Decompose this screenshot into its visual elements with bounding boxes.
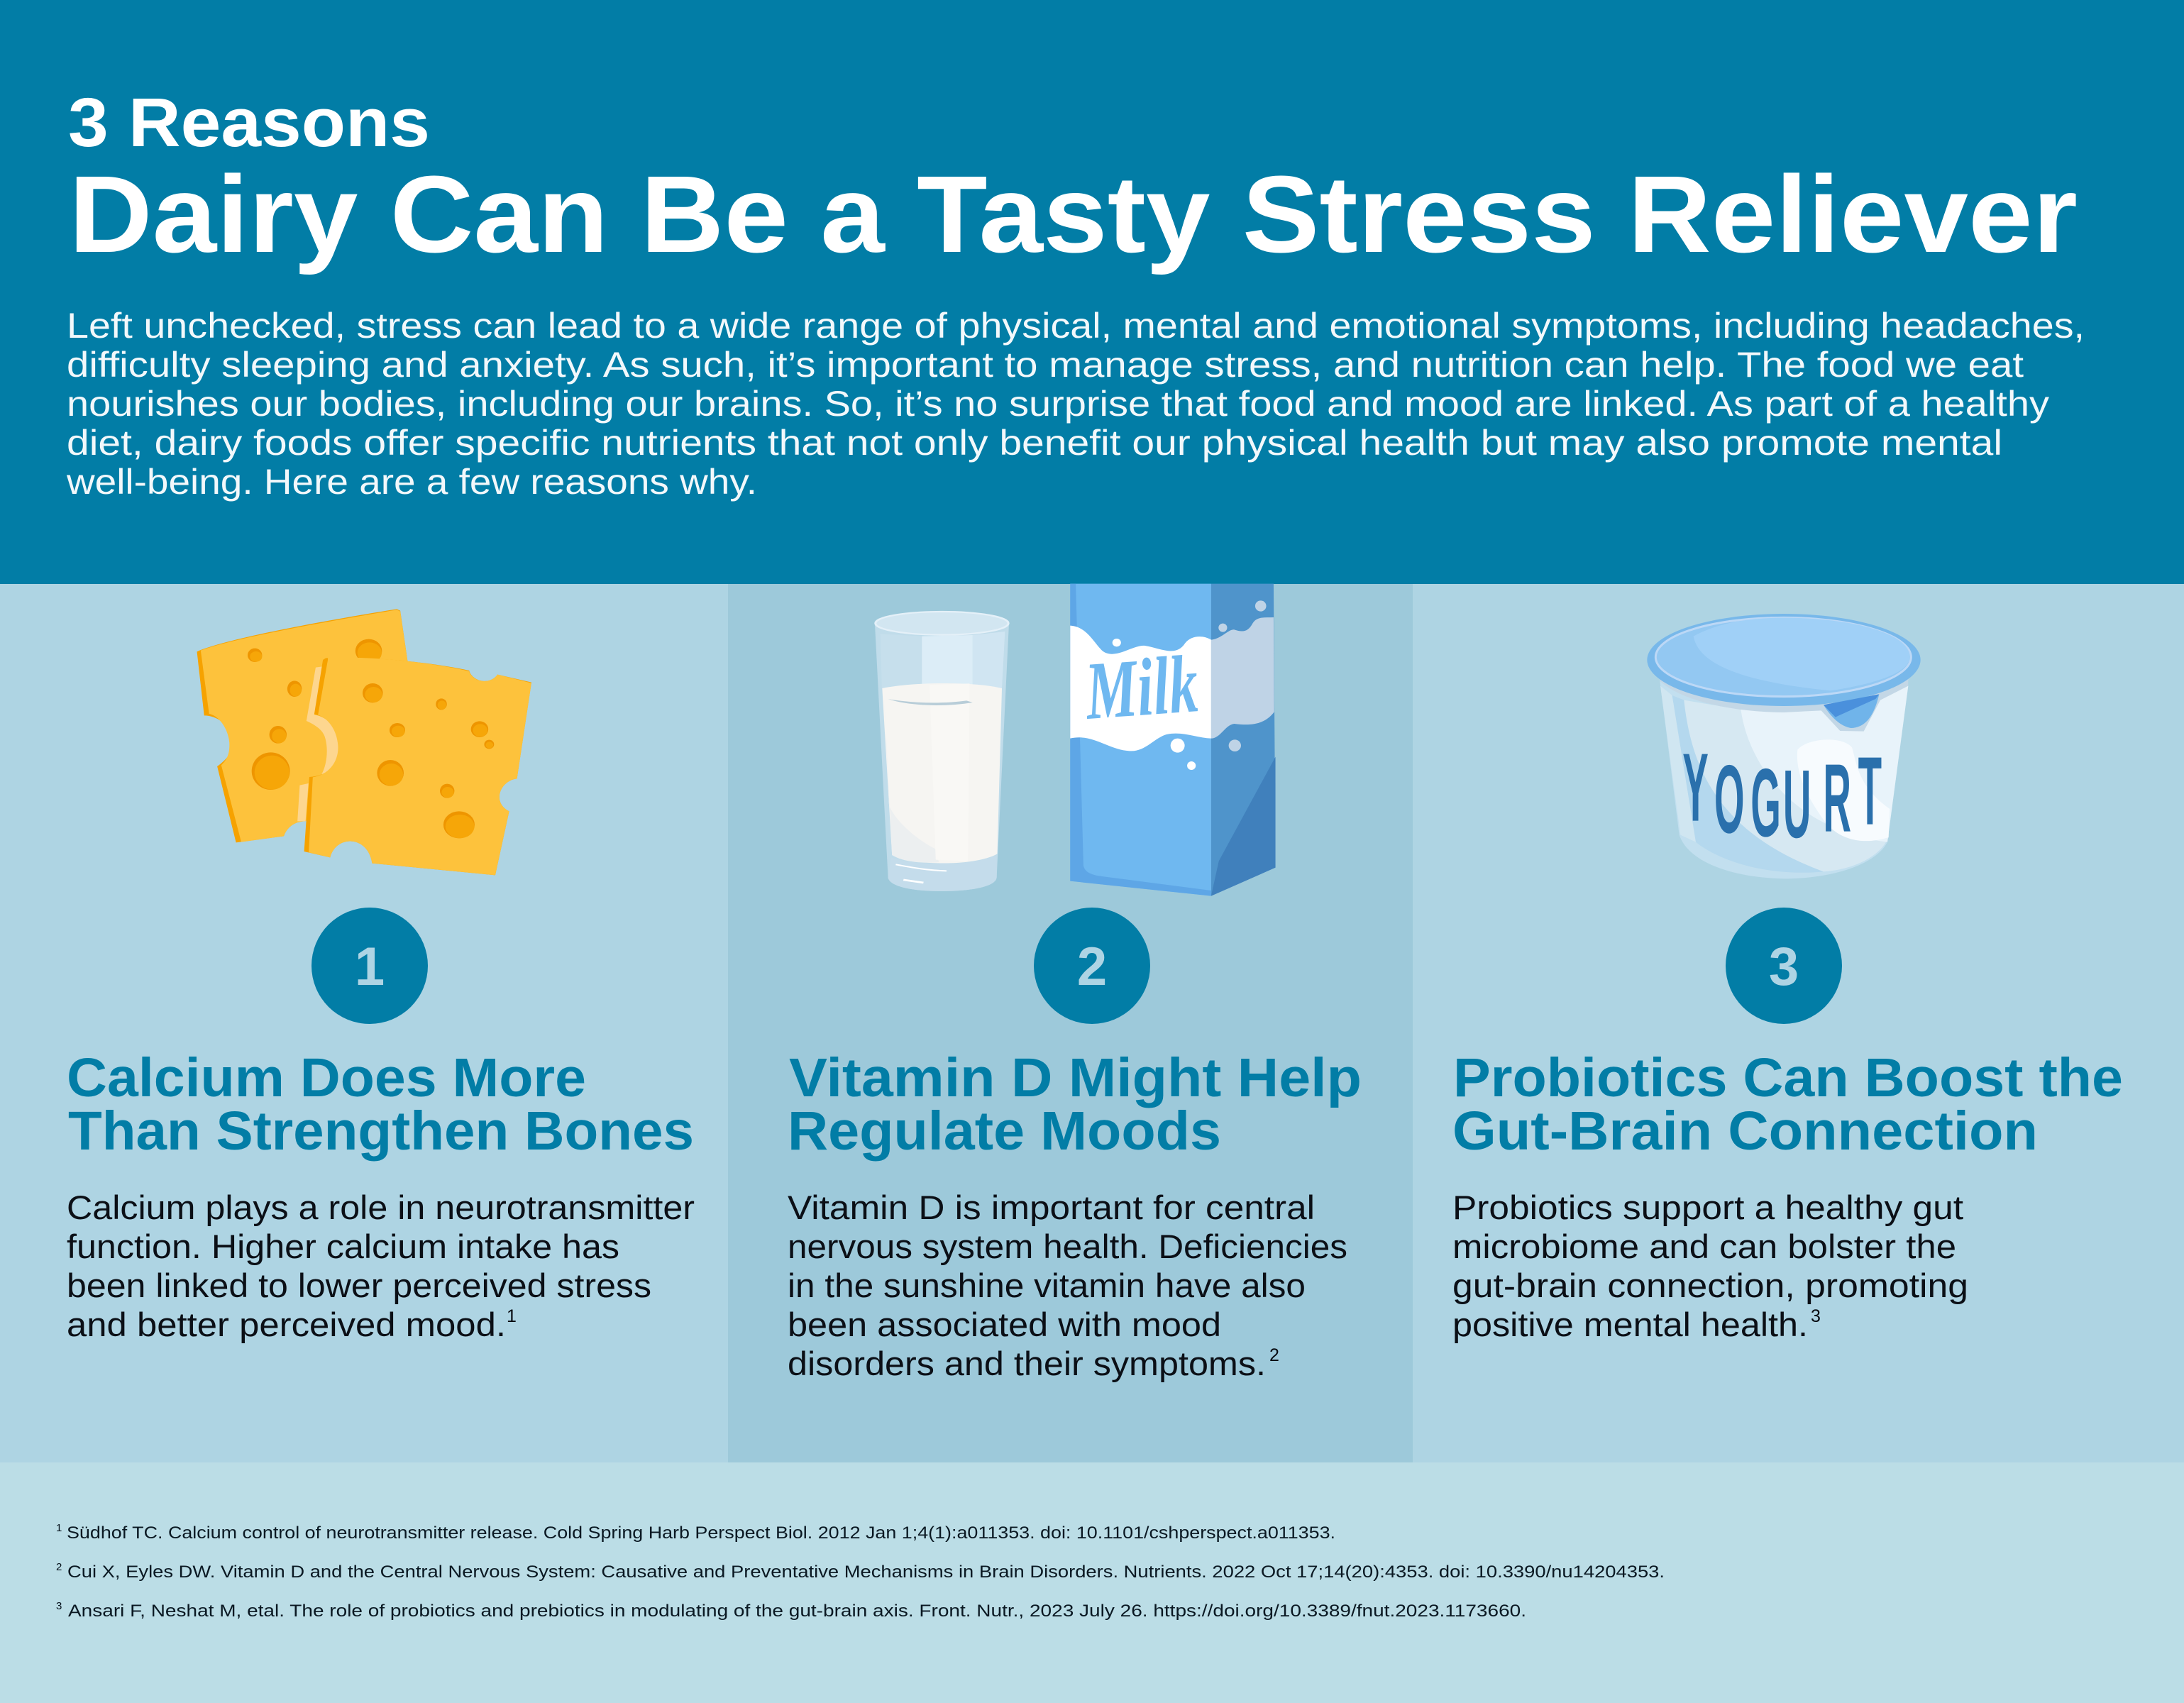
intro paragraph: well-being. Here are a few reasons why. bbox=[66, 462, 757, 502]
body text 2 bbox=[788, 1189, 1347, 1382]
references: 3 bbox=[56, 1600, 62, 1612]
number badge 3 bbox=[1726, 908, 1842, 1024]
subtitle: 3 Reasons bbox=[68, 84, 430, 161]
references: 1 bbox=[56, 1522, 62, 1534]
body text 1: 1 bbox=[507, 1306, 517, 1326]
heading 2 bbox=[788, 1047, 1362, 1162]
references: Südhof TC. Calcium control of neurotransmitter release. Cold Spring Harb Perspect Biol. 2012 Jan 1;4(1):a011353. doi: 10.1101/cshperspect.a011353. bbox=[67, 1523, 1335, 1543]
heading 3 bbox=[1452, 1047, 2123, 1162]
title: Dairy Can Be a Tasty Stress Reliever bbox=[69, 153, 2078, 275]
intro paragraph: difficulty sleeping and anxiety. As such, it’s important to manage stress, and nutrition can help. The food we eat bbox=[67, 345, 2024, 385]
body text 3: gut-brain connection, promoting bbox=[1452, 1267, 1968, 1304]
heading 3: Probiotics Can Boost the bbox=[1453, 1047, 2123, 1108]
body text 3: positive mental health. bbox=[1452, 1306, 1808, 1343]
panel: reason 1 background bbox=[0, 584, 728, 1462]
cup label: YOGURT bbox=[1682, 734, 1882, 859]
icon: cheese slices bbox=[197, 609, 531, 875]
body text 3: microbiome and can bolster the bbox=[1452, 1228, 1956, 1265]
icon: yogurt cup bbox=[1647, 614, 1921, 878]
intro paragraph bbox=[66, 306, 2085, 502]
heading 1: Calcium Does More bbox=[67, 1047, 586, 1108]
reason 2 bbox=[788, 908, 1362, 1382]
heading 3: Gut-Brain Connection bbox=[1452, 1101, 2038, 1162]
intro paragraph: nourishes our bodies, including our brains. So, it’s no surprise that food and mood are linked. As part of a healthy bbox=[67, 384, 2049, 424]
panel: header bbox=[0, 0, 2184, 584]
number badge 2: 2 bbox=[1077, 937, 1107, 997]
panel: footer background bbox=[0, 1462, 2184, 1703]
body text 1: Calcium plays a role in neurotransmitter bbox=[67, 1189, 695, 1226]
body text 2: 2 bbox=[1269, 1345, 1279, 1365]
references: Cui X, Eyles DW. Vitamin D and the Central Nervous System: Causative and Preventative Mechanisms in Brain Disorders. Nutrients. 2022 Oct 17;14(20):4353. doi: 10.3390/nu14204353. bbox=[67, 1563, 1665, 1582]
heading 2: Regulate Moods bbox=[788, 1101, 1221, 1162]
body text 3 bbox=[1452, 1189, 1968, 1343]
number badge 2 bbox=[1034, 908, 1150, 1024]
references bbox=[56, 1522, 1665, 1621]
number badge 1 bbox=[311, 908, 428, 1024]
intro paragraph: Left unchecked, stress can lead to a wide range of physical, mental and emotional symptoms, including headaches, bbox=[67, 306, 2085, 346]
body text 2: in the sunshine vitamin have also bbox=[788, 1267, 1306, 1304]
body text 1 bbox=[67, 1189, 695, 1343]
body text 1: function. Higher calcium intake has bbox=[67, 1228, 619, 1265]
references: 2 bbox=[56, 1561, 62, 1573]
panel: reason 3 background bbox=[1413, 584, 2184, 1462]
panel: reason 2 background bbox=[728, 584, 1413, 1462]
heading 1: Than Strengthen Bones bbox=[68, 1101, 694, 1162]
icon: glass of milk bbox=[875, 612, 1009, 891]
body text 2: Vitamin D is important for central bbox=[788, 1189, 1315, 1226]
heading 2: Vitamin D Might Help bbox=[789, 1047, 1362, 1108]
body text 3: Probiotics support a healthy gut bbox=[1452, 1189, 1963, 1226]
body text 2: been associated with mood bbox=[788, 1306, 1221, 1343]
number badge 3: 3 bbox=[1769, 937, 1799, 997]
icon: milk carton bbox=[1070, 584, 1276, 896]
body text 1: been linked to lower perceived stress bbox=[67, 1267, 651, 1304]
body text 2: disorders and their symptoms. bbox=[788, 1345, 1266, 1382]
number badge 1: 1 bbox=[355, 937, 385, 997]
intro paragraph: diet, dairy foods offer specific nutrients that not only benefit our physical health but may also promote mental bbox=[67, 423, 2002, 463]
reason 1 bbox=[67, 908, 695, 1343]
references: Ansari F, Neshat M, etal. The role of probiotics and prebiotics in modulating of the gut-brain axis. Front. Nutr., 2023 July 26. https://doi.org/10.3389/fnut.2023.1173660. bbox=[68, 1602, 1526, 1621]
reason 3 bbox=[1452, 908, 2123, 1343]
carton label: Milk bbox=[1081, 639, 1201, 737]
heading 1 bbox=[67, 1047, 694, 1162]
body text 3: 3 bbox=[1811, 1306, 1821, 1326]
body text 1: and better perceived mood. bbox=[67, 1306, 506, 1343]
body text 2: nervous system health. Deficiencies bbox=[788, 1228, 1347, 1265]
